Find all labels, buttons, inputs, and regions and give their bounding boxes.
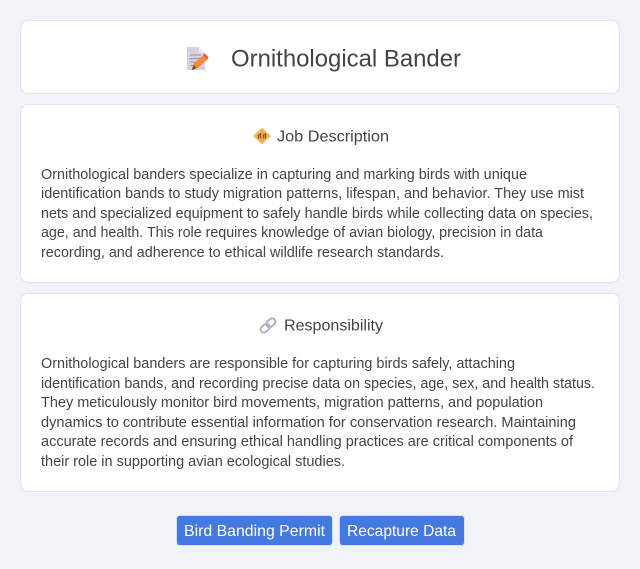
button: recapture data: Recapture Data [347, 523, 456, 540]
button: recapture data [340, 516, 464, 546]
button: bird banding permit: Bird Banding Permit [184, 523, 326, 540]
text block: responsibility: accurate records and ensuring ethical handling practices are critical components of [41, 434, 574, 450]
icon: orange diamond [254, 128, 270, 144]
panel: responsibility [20, 294, 620, 492]
text block: job description [41, 167, 593, 261]
panel: job description [20, 104, 620, 282]
text block: job description: recording, and adherence to ethical wildlife research standards. [41, 245, 444, 261]
panel: title header [20, 20, 620, 94]
button: bird banding permit [176, 516, 332, 546]
text block: job description: nets and specialized equipment to safely handle birds while collecting data on species, [41, 206, 593, 222]
text block: job description: age, and health. This role requires knowledge of avian biology, precision in data [41, 225, 543, 241]
text block: responsibility: Ornithological banders are responsible for capturing birds safely, attaching [41, 356, 515, 372]
text block: responsibility: dynamics to contribute essential information for conservation research. Maintaining [41, 415, 576, 431]
text block: job description: identification bands to study migration patterns, lifespan, and behavior. They use mist [41, 186, 584, 202]
text block: responsibility [41, 356, 595, 470]
icon: chain link [259, 317, 277, 334]
icon: document with pencil [187, 47, 208, 70]
text block: responsibility: They meticulously monitor bird movements, migration patterns, and population [41, 395, 543, 411]
text block: responsibility: identification bands, and recording precise data on species, age, sex, and health status. [41, 376, 595, 392]
heading: job description: Job Description [277, 128, 389, 146]
title: Ornithological Bander [231, 46, 461, 72]
heading: responsibility: Responsibility [284, 318, 383, 334]
text block: responsibility: their role in supporting avian ecological studies. [41, 454, 345, 470]
text block: job description: Ornithological banders specialize in capturing and marking birds with unique [41, 167, 527, 183]
